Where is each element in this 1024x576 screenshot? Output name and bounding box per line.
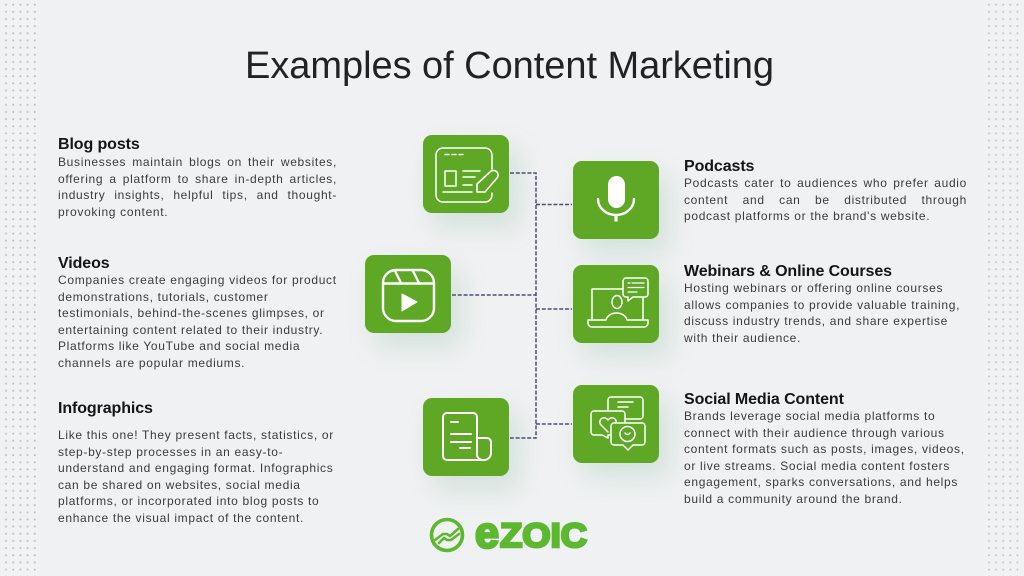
logo: ezoic: ZOIC: [500, 517, 587, 555]
body: Infographics: platforms, or incorporated into blog posts to: [58, 494, 319, 508]
body: Videos: entertaining content related to their industry.: [58, 322, 323, 336]
heading: Social Media Content: Social Media Content: [684, 391, 844, 408]
icon tile: microphone: [573, 161, 659, 239]
body: Social Media Content: connect with their audience through various: [684, 426, 945, 440]
body: Webinars: with their audience.: [684, 330, 801, 344]
body: Infographics: [58, 428, 334, 524]
body: Webinars: Hosting webinars or offering online courses: [684, 281, 943, 295]
heading: Podcasts: Podcasts: [684, 158, 754, 175]
body: Podcasts: content and can be distributed through: [684, 192, 967, 206]
heading: Infographics: Infographics: [58, 400, 153, 417]
heading: Videos: Videos: [58, 255, 110, 272]
body: Videos: Platforms like YouTube and social media: [58, 339, 300, 353]
icon tile: social media: [573, 385, 659, 463]
body: Blog posts: provoking content.: [58, 204, 168, 218]
body: Social Media Content: [684, 409, 965, 506]
body: Videos: testimonials, behind-the-scenes glimpses, or: [58, 306, 325, 320]
body: Blog posts: industry insights, helpful tips, and thought-: [58, 188, 337, 202]
body: Social Media Content: or live streams. Social media content fosters: [684, 458, 950, 472]
logo: ezoic: [430, 512, 588, 558]
body: Blog posts: Businesses maintain blogs on their websites,: [58, 155, 337, 169]
body: Webinars: discuss industry trends, and share expertise: [684, 314, 948, 328]
body: Infographics: step-by-step processes in an easy-to-: [58, 444, 283, 458]
title: Examples of Content Marketing: [245, 45, 774, 87]
body: Social Media Content: engagement, sparks conversations, and helps: [684, 475, 958, 489]
icon tile: infographic document: [423, 398, 509, 476]
body: Social Media Content: build a community around the brand.: [684, 492, 903, 506]
icon tile: blog article: [423, 135, 509, 213]
body: Videos: demonstrations, tutorials, customer: [58, 290, 269, 304]
body: Social Media Content: content formats such as posts, images, videos,: [684, 442, 965, 456]
body: Infographics: can be shared on websites, social media: [58, 478, 301, 492]
body: Podcasts: [684, 176, 967, 223]
body: Social Media Content: Brands leverage social media platforms to: [684, 409, 935, 423]
body: Infographics: enhance the visual impact of the content.: [58, 510, 304, 524]
body: Videos: Companies create engaging videos for product: [58, 273, 337, 287]
text block: Blog posts: [58, 136, 337, 218]
icon tile: webinar: [573, 265, 659, 343]
body: Videos: [58, 273, 337, 370]
heading: Webinars: Webinars & Online Courses: [684, 263, 892, 280]
body: Podcasts: podcast platforms or the brand's website.: [684, 209, 930, 223]
body: Videos: channels are popular mediums.: [58, 356, 245, 370]
body: Infographics: understand and engaging format. Infographics: [58, 461, 333, 475]
body: Blog posts: offering a platform to share in-depth articles,: [58, 172, 337, 186]
text block: Webinars: [684, 263, 960, 344]
text block: Social Media Content: [684, 391, 965, 506]
text block: Videos: [58, 255, 337, 370]
heading: Blog posts: Blog posts: [58, 136, 140, 153]
icon tile: video reel: [365, 255, 451, 333]
text block: Infographics: [58, 400, 334, 524]
text block: Podcasts: [684, 158, 967, 223]
body: Infographics: Like this one! They present facts, statistics, or: [58, 428, 334, 442]
body: Blog posts: [58, 155, 337, 218]
body: Webinars: allows companies to provide valuable training,: [684, 298, 960, 312]
body: Podcasts: Podcasts cater to audiences who prefer audio: [684, 176, 967, 190]
body: Webinars: [684, 281, 960, 344]
